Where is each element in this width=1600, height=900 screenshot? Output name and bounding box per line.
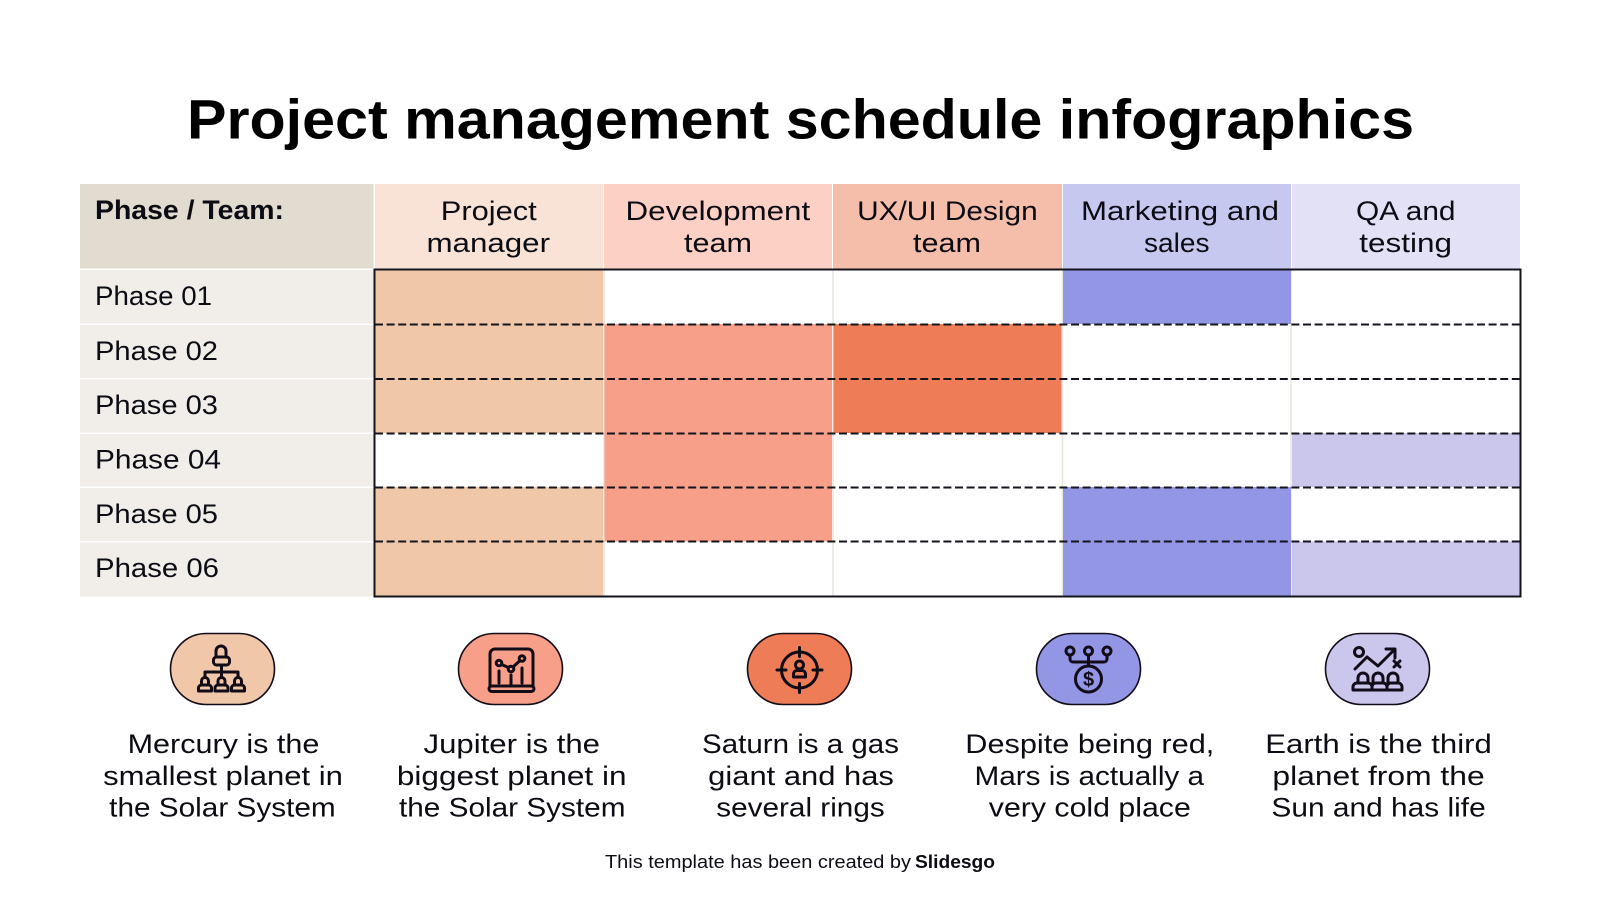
header: development team: [604, 184, 832, 269]
description: several rings: [716, 792, 885, 822]
header: UX/UI design team: UX/UI Design: [857, 196, 1038, 226]
description: Mercury is the: [128, 729, 319, 759]
description: the Solar System: [399, 792, 626, 822]
description: Despite being red,: [965, 729, 1214, 759]
description: very cold place: [989, 792, 1191, 822]
schedule grid cells: [374, 269, 1520, 596]
header: UX/UI design team: [833, 184, 1062, 269]
description: Saturn is a gas: [702, 729, 899, 759]
description: [702, 729, 899, 822]
column 4: marketing legend: [965, 634, 1214, 822]
pill icon: target person: [748, 634, 852, 704]
header: marketing and sales: [1063, 184, 1291, 269]
header: phase / team: [80, 184, 374, 268]
description: Earth is the third: [1265, 729, 1492, 759]
header: QA and testing: [1292, 184, 1520, 269]
phase labels: Phase 01: [95, 281, 212, 311]
phase labels: Phase 03: [95, 390, 218, 420]
description: smallest planet in: [103, 761, 343, 791]
pill icon: money network: $: [1083, 669, 1094, 691]
description: the Solar System: [109, 792, 336, 822]
pill icon: money network: [1036, 634, 1140, 704]
header: project manager: [375, 184, 603, 269]
description: biggest planet in: [397, 761, 626, 791]
phase labels: Phase 06: [95, 553, 219, 583]
title: Project management schedule infographics: [187, 88, 1414, 150]
description: planet from the: [1272, 761, 1485, 791]
column 1: project manager legend: [103, 634, 343, 822]
description: Mars is actually a: [974, 761, 1205, 791]
pill icon: team with trend chart: [1326, 634, 1430, 704]
phase labels: Phase 04: [95, 444, 221, 474]
schedule table: [80, 184, 1520, 596]
header: project manager: manager: [426, 228, 550, 258]
description: giant and has: [708, 761, 894, 791]
header: QA and testing: testing: [1359, 228, 1452, 258]
phase labels: Phase 02: [95, 336, 218, 366]
description: [397, 729, 626, 822]
header: development team: team: [684, 228, 752, 258]
header: phase / team: Phase / Team:: [95, 195, 284, 225]
header: UX/UI design team: team: [913, 228, 981, 258]
header: marketing and sales: sales: [1144, 228, 1210, 258]
description: [1265, 729, 1492, 822]
description: [103, 729, 343, 822]
column 2: development legend: [397, 634, 626, 822]
pill icon: chart screen: [458, 634, 562, 704]
header: development team: Development: [626, 196, 811, 226]
footer credit: Slidesgo: [915, 852, 995, 872]
header: QA and testing: QA and: [1356, 196, 1456, 226]
footer credit: This template has been created by: [605, 852, 911, 872]
column 3: UX/UI legend: [702, 634, 899, 822]
table header row: [80, 184, 1520, 269]
description: [965, 729, 1214, 822]
header: project manager: Project: [441, 196, 537, 226]
pill icon: org chart: [170, 634, 274, 704]
description: Sun and has life: [1271, 792, 1486, 822]
phase labels: Phase 05: [95, 499, 218, 529]
description: Jupiter is the: [424, 729, 600, 759]
header: marketing and sales: Marketing and: [1081, 196, 1279, 226]
column 5: QA legend: [1265, 634, 1492, 822]
phase labels: [80, 270, 374, 596]
